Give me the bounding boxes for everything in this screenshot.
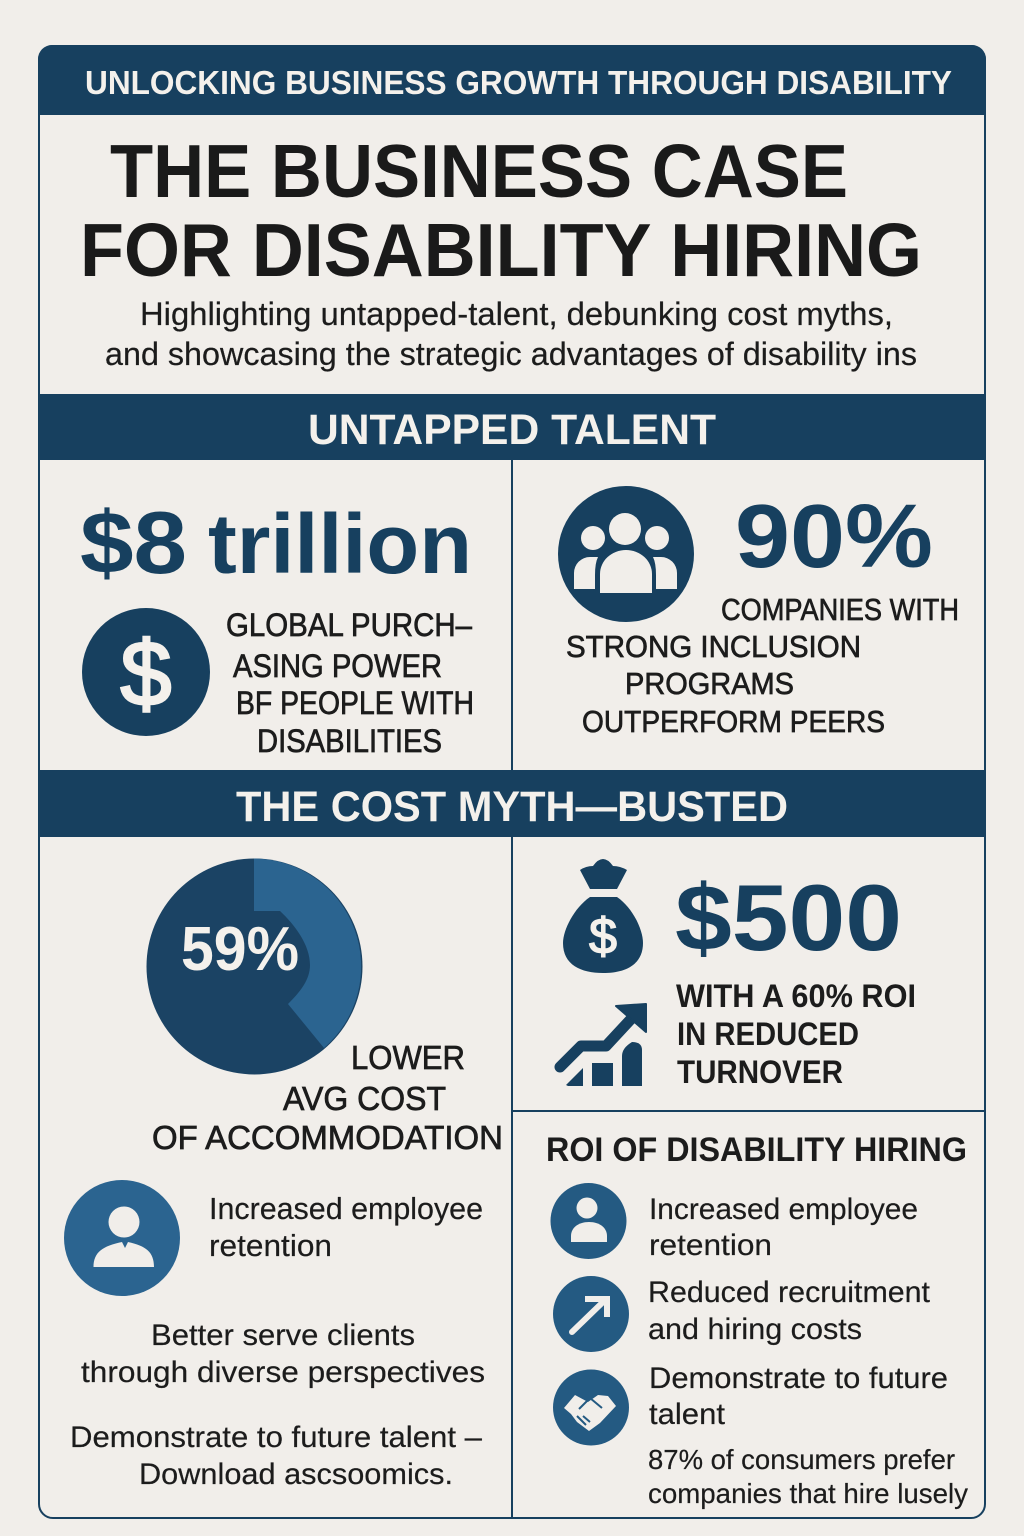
icon: dollar circle: $ [120, 623, 172, 725]
return text: TURNOVER [677, 1054, 843, 1090]
ROI item: future talent: talent [649, 1398, 726, 1431]
icon: money bag: $ [589, 908, 617, 964]
benefit: retention: retention [209, 1228, 332, 1263]
pie chart: 59%: 59% [181, 915, 299, 984]
ROI item: retention: Increased employee [649, 1193, 918, 1226]
benefit: clients: through diverse perspectives [81, 1356, 485, 1389]
main title: FOR DISABILITY HIRING [80, 208, 922, 292]
icon: growth chart [560, 1004, 646, 1086]
section header: cost myth: THE COST MYTH—BUSTED [236, 783, 788, 831]
subtitle [105, 296, 917, 372]
benefit: retention: Increased employee [209, 1191, 483, 1226]
panel: ROI of disability hiring [546, 1131, 968, 1509]
return text: IN REDUCED [677, 1016, 859, 1052]
inclusion text: STRONG INCLUSION [566, 629, 861, 664]
section header: cost myth [38, 770, 986, 837]
icon: employee [64, 1180, 180, 1296]
inclusion text: COMPANIES WITH [721, 592, 959, 627]
ROI item: recruitment: Reduced recruitment [648, 1276, 931, 1309]
pie chart: 59% [146, 858, 362, 1074]
panel: accommodation cost [64, 858, 503, 1491]
benefit: clients: Better serve clients [151, 1319, 415, 1352]
icon: dollar circle [82, 608, 210, 736]
subtitle: and showcasing the strategic advantages of disability ins [105, 336, 917, 372]
stat: $8 trillion [80, 493, 472, 592]
stat: $8 trillion: $8 [80, 493, 187, 592]
benefit: retention [209, 1191, 483, 1263]
subtitle: Highlighting untapped-talent, debunking cost myths, [140, 296, 893, 332]
icon: arrow up [553, 1276, 629, 1352]
benefit: future talent: Download ascsoomics. [139, 1458, 453, 1491]
top banner: UNLOCKING BUSINESS GROWTH THROUGH DISABILITY [85, 64, 952, 101]
panel: $500 return [560, 859, 916, 1090]
panel: inclusion programs [558, 486, 959, 739]
ROI item: recruitment [648, 1276, 931, 1346]
purchasing power text: GLOBAL PURCH– [226, 607, 472, 643]
stat: $8 trillion: trillion [208, 497, 472, 591]
benefit: clients [81, 1319, 485, 1389]
accommodation text: AVG COST [283, 1080, 446, 1117]
benefit: future talent [70, 1421, 482, 1491]
return text [676, 978, 916, 1090]
purchasing power text: BF PEOPLE WITH [236, 685, 474, 721]
stat: 90%: 90% [735, 487, 933, 587]
ROI item: future talent [649, 1362, 948, 1431]
top banner [38, 45, 986, 115]
accommodation text: LOWER [351, 1039, 465, 1076]
ROI item: future talent: Demonstrate to future [649, 1362, 948, 1395]
ROI item: consumers: 87% of consumers prefer [648, 1444, 955, 1475]
ROI item: retention [649, 1193, 918, 1262]
inclusion text: OUTPERFORM PEERS [582, 704, 885, 739]
benefit: future talent: Demonstrate to future talent – [70, 1421, 482, 1454]
stat: $500: $500 [675, 865, 902, 970]
purchasing power text: DISABILITIES [257, 723, 442, 759]
accommodation text: OF ACCOMMODATION [152, 1119, 503, 1156]
panel: purchasing power [80, 493, 474, 759]
inclusion text [566, 592, 959, 739]
accommodation text [152, 1039, 503, 1156]
section header: untapped talent [38, 394, 986, 460]
main title [80, 129, 922, 292]
icon: handshake [553, 1370, 629, 1446]
ROI item: consumers: companies that hire lusely [648, 1478, 968, 1509]
ROI item: consumers [648, 1444, 968, 1509]
inclusion text: PROGRAMS [625, 666, 794, 701]
section header: untapped talent: UNTAPPED TALENT [308, 406, 716, 454]
ROI item: retention: retention [649, 1229, 772, 1262]
main title: THE BUSINESS CASE [110, 129, 848, 213]
purchasing power text: ASING POWER [233, 648, 442, 684]
ROI item: recruitment: and hiring costs [648, 1313, 862, 1346]
icon: group of people [558, 486, 694, 622]
panel heading: ROI OF DISABILITY HIRING [546, 1131, 967, 1169]
return text: WITH A 60% ROI [676, 978, 916, 1014]
icon: person [550, 1183, 626, 1259]
purchasing power text [226, 607, 474, 759]
icon: money bag [563, 859, 643, 973]
